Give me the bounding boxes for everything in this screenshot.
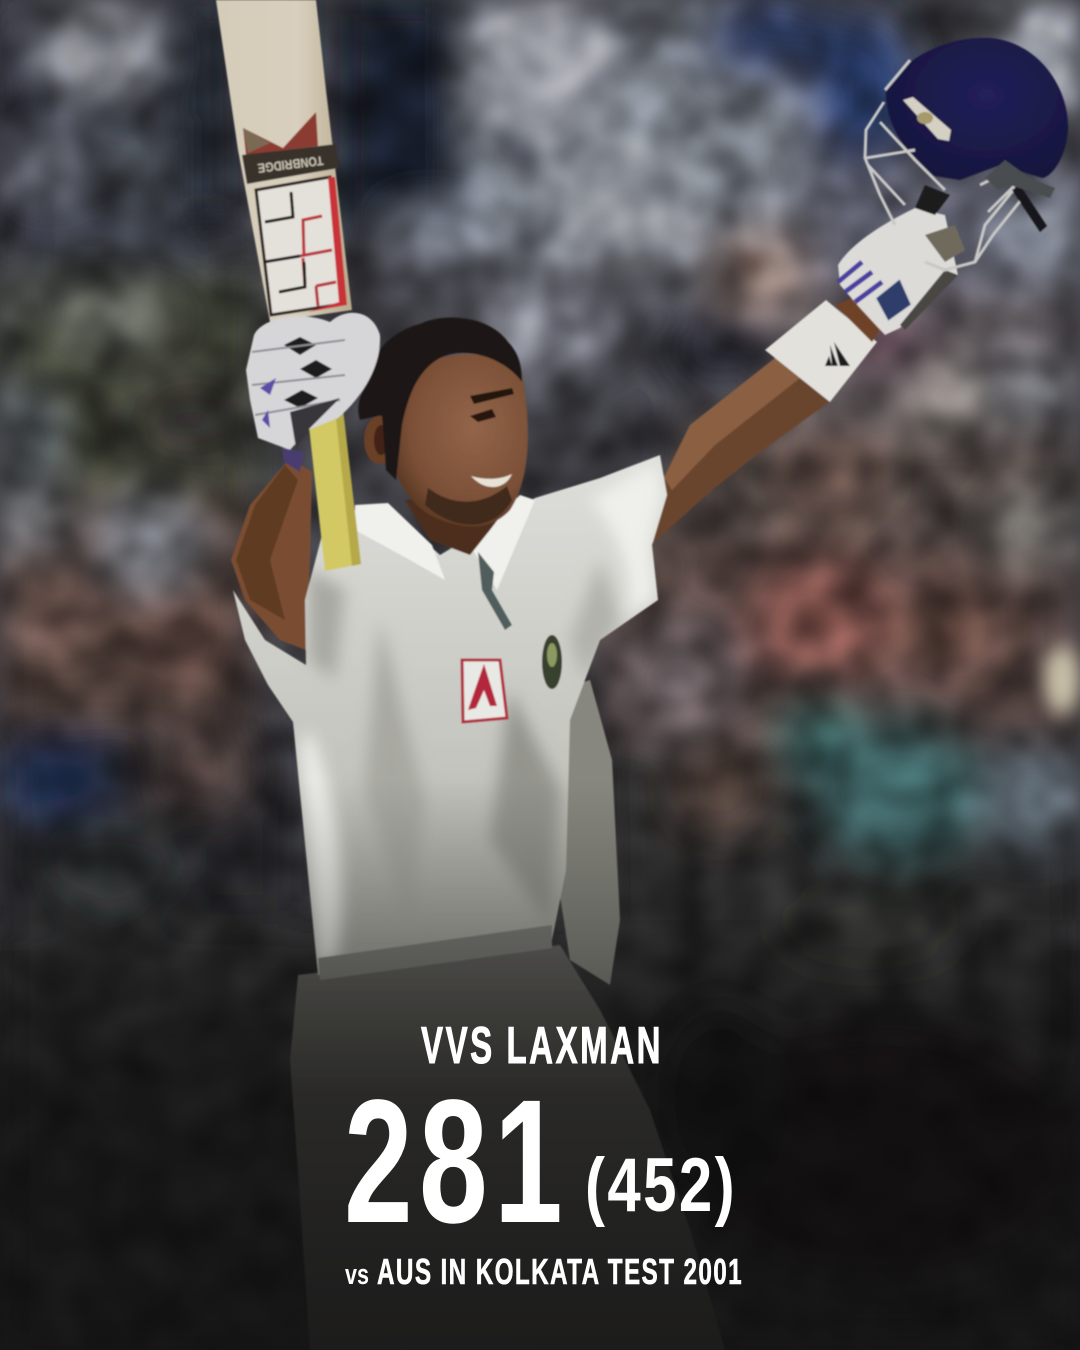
bat blade xyxy=(216,0,352,322)
ear xyxy=(364,416,394,464)
match venue and year: AUS IN KOLKATA TEST 2001 xyxy=(377,1251,743,1292)
beard shadow xyxy=(425,486,512,525)
neck xyxy=(405,490,520,555)
right forearm end xyxy=(835,296,880,342)
match context: vs xyxy=(345,1259,369,1291)
player: TONBRIDGE xyxy=(257,153,324,176)
helmet grille xyxy=(865,60,1025,270)
runs score: 281 xyxy=(344,1064,569,1260)
right arm xyxy=(645,358,832,550)
shirt soft shading xyxy=(300,462,662,970)
hair xyxy=(358,318,522,480)
mid left xyxy=(0,270,260,500)
shirt body xyxy=(233,455,667,975)
smile xyxy=(471,474,512,487)
bat sticker top xyxy=(243,112,318,155)
helmet xyxy=(886,38,1068,180)
badge xyxy=(542,635,562,689)
shirt back fold xyxy=(545,680,620,985)
eyes and brows xyxy=(470,388,514,404)
player name: VVS LAXMAN xyxy=(421,1017,663,1075)
right glove xyxy=(838,208,958,335)
left glove xyxy=(246,313,380,450)
balls faced: (452) xyxy=(585,1143,737,1228)
mid right xyxy=(780,290,1080,420)
left arm xyxy=(231,458,312,650)
collar xyxy=(355,503,445,580)
adidas mark xyxy=(825,342,850,366)
waist band xyxy=(318,925,552,980)
bottom dark gradient xyxy=(0,780,1080,1350)
bat SS logo xyxy=(256,177,342,315)
wristband xyxy=(765,300,877,402)
cream blob at right edge xyxy=(1044,646,1080,714)
player xyxy=(216,0,1068,1350)
trousers xyxy=(290,945,725,1350)
sponsor logo xyxy=(462,660,507,722)
face xyxy=(385,354,528,526)
bat handle xyxy=(306,395,361,571)
